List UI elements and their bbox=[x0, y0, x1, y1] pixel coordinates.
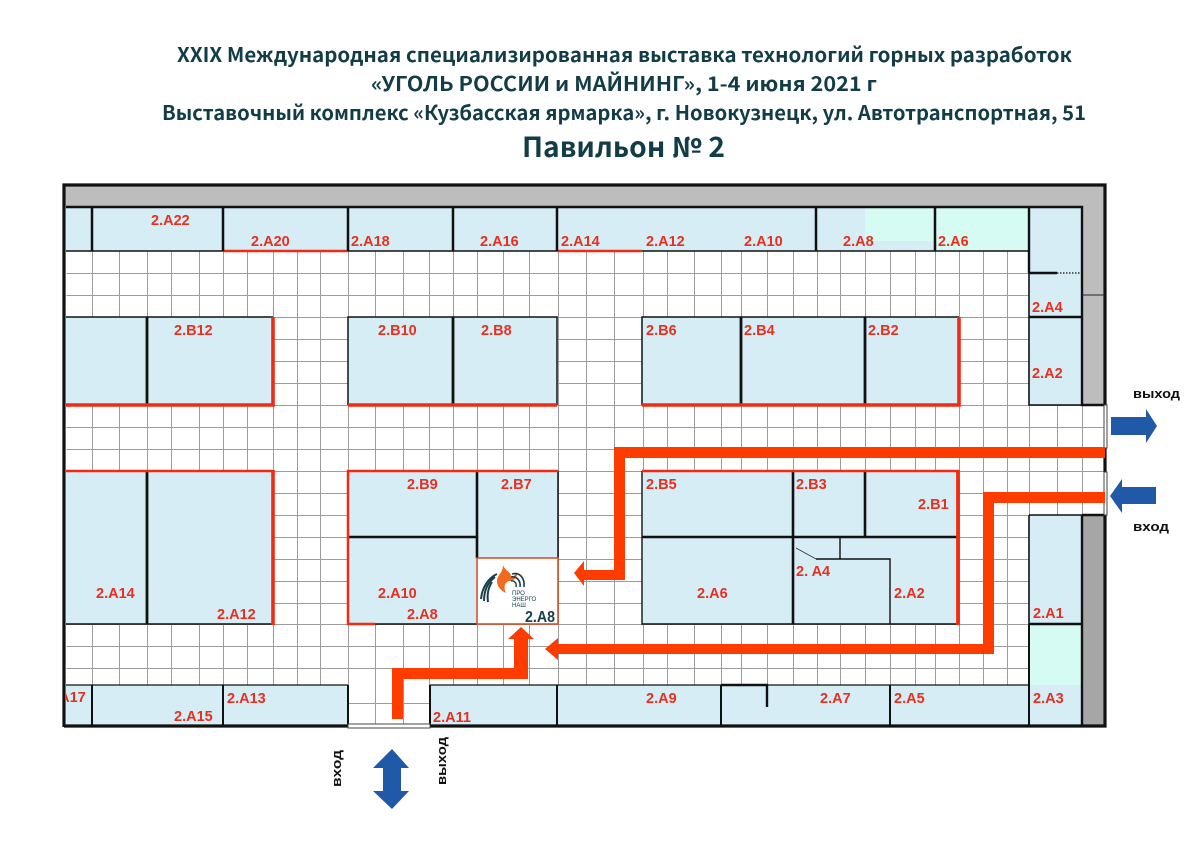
floor bbox=[64, 184, 1106, 727]
title line 2: «УГОЛЬ РОССИИ и МАЙНИНГ», 1-4 июня 2021 г bbox=[371, 68, 877, 97]
booths: bottom row bbox=[66, 625, 1029, 725]
label: right entrance: вход bbox=[1133, 520, 1169, 534]
blue arrow: bottom two-way bbox=[373, 749, 409, 809]
booths: lower middle block bbox=[348, 471, 558, 624]
route arrow: from bottom entrance to stand bbox=[392, 627, 534, 719]
route arrow: from right entrance to stand bbox=[545, 492, 1105, 660]
label: bottom entrance: вход bbox=[330, 750, 344, 787]
logo: left swoosh bbox=[481, 574, 497, 602]
pavilion heading: Павильон № 2 bbox=[522, 126, 725, 166]
booth labels: 2.A16 bbox=[480, 234, 519, 250]
booth labels: 2.A1 bbox=[1033, 606, 1064, 622]
title block bbox=[162, 39, 1086, 166]
booth labels: 2.A12 bbox=[646, 234, 685, 250]
booth labels: 2.A8 bbox=[407, 607, 438, 623]
booth labels: 2.A5 bbox=[894, 691, 925, 707]
booths: lower left block bbox=[66, 470, 273, 625]
booth labels: 2.A2 bbox=[894, 586, 925, 602]
booth labels: 2.B7 bbox=[501, 477, 532, 493]
booth labels: 2.B8 bbox=[481, 323, 512, 339]
outer walls frame bbox=[64, 185, 1105, 727]
booth labels: 2.B2 bbox=[868, 323, 899, 339]
booth labels: 2.B3 bbox=[796, 477, 827, 493]
label: right exit: выход bbox=[1133, 387, 1180, 401]
booth labels: 2.A17 bbox=[47, 690, 86, 706]
booths: upper right block bbox=[642, 317, 959, 405]
booth labels: 2.B10 bbox=[378, 323, 417, 339]
logo: wordmark: НАШ bbox=[512, 603, 526, 609]
floor plan bbox=[47, 184, 1107, 728]
booth labels bbox=[47, 213, 1064, 726]
booth labels: 2.B5 bbox=[646, 477, 677, 493]
booth labels: 2.A6 bbox=[697, 586, 728, 602]
booths: upper left block bbox=[66, 317, 273, 405]
booth labels: 2.B1 bbox=[918, 497, 949, 513]
logo stand label: 2.A8 bbox=[525, 609, 555, 626]
logo: right swoosh bbox=[511, 574, 524, 587]
booth labels: 2.A12 bbox=[217, 607, 256, 623]
booth labels: 2.B6 bbox=[646, 323, 677, 339]
booth labels: 2.A14 bbox=[561, 234, 600, 250]
booth labels: 2.A2 bbox=[1032, 366, 1063, 382]
booth labels: 2.A6 bbox=[938, 234, 969, 250]
booths: upper middle block bbox=[348, 317, 557, 405]
booths: right column bbox=[1029, 207, 1082, 725]
gray outer wall bbox=[64, 184, 1106, 405]
route arrow: from right exit to stand bbox=[574, 447, 1105, 586]
booth labels: 2.A9 bbox=[646, 691, 677, 707]
booth labels: 2.A7 bbox=[820, 691, 851, 707]
floor grid bbox=[66, 252, 1106, 726]
logo stand 2.A8 bbox=[477, 558, 558, 626]
booth labels: 2.A8 bbox=[843, 234, 874, 250]
blue arrow: right entrance bbox=[1110, 479, 1156, 513]
booth labels: 2.A13 bbox=[227, 691, 266, 707]
logo: flame bbox=[497, 565, 517, 593]
blue arrow: right exit bbox=[1111, 409, 1157, 443]
booth labels: 2.A14 bbox=[96, 586, 135, 602]
booth labels: 2.B9 bbox=[407, 477, 438, 493]
title line 3: Выставочный комплекс «Кузбасская ярмарка», г. Новокузнецк, ул. Автотранспортная, 51 bbox=[162, 97, 1086, 126]
booth labels: 2.A10 bbox=[744, 234, 783, 250]
booth labels: 2.A18 bbox=[351, 234, 390, 250]
logo: wordmark: ПРО bbox=[512, 591, 525, 597]
dark gray wall section bbox=[1082, 515, 1106, 727]
booth labels: 2.A11 bbox=[433, 710, 471, 726]
booth labels: 2.A4 bbox=[1032, 300, 1063, 316]
booth labels: 2.B12 bbox=[174, 323, 213, 339]
booths: top row bbox=[66, 207, 1029, 251]
doors bbox=[348, 405, 1107, 728]
title line 1: XXIX Международная специализированная выставка технологий горных разработок bbox=[177, 39, 1072, 68]
booth labels: 2.A10 bbox=[378, 586, 417, 602]
label: bottom exit: выход bbox=[435, 737, 449, 785]
booth labels: 2. A4 bbox=[796, 564, 830, 580]
booth labels: 2.A20 bbox=[251, 234, 290, 250]
logo: wordmark: ЭНЕРГО bbox=[512, 597, 537, 603]
booth labels: 2.A22 bbox=[151, 213, 190, 229]
booth labels: 2.A3 bbox=[1033, 691, 1064, 707]
booth labels: 2.B4 bbox=[744, 323, 775, 339]
booths: lower right block bbox=[642, 470, 959, 625]
booth labels: 2.A15 bbox=[174, 709, 213, 725]
